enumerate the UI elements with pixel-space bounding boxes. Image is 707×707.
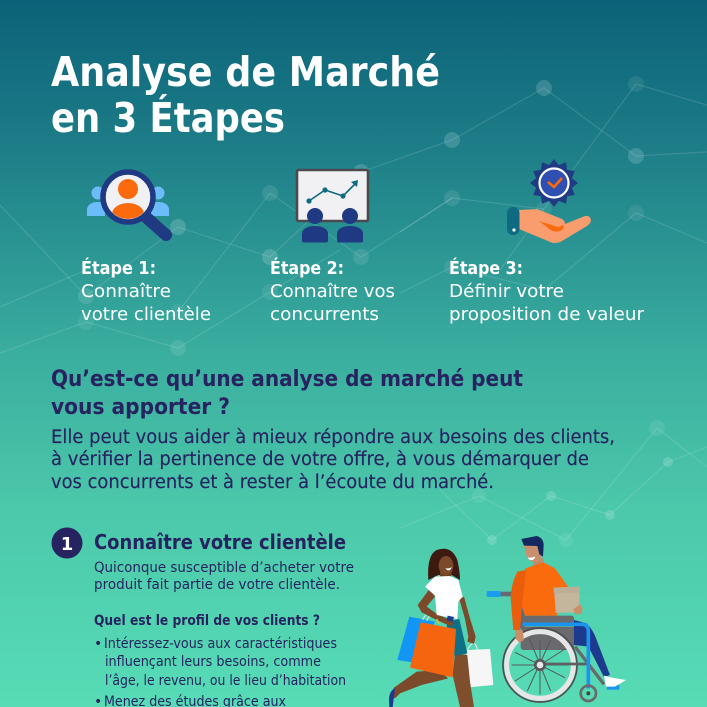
step 1 label: Étape 1: xyxy=(81,257,156,279)
bullet list: l’âge, le revenu, ou le lieu d’habitation xyxy=(105,673,346,689)
step 2 label: Étape 2: xyxy=(270,257,344,279)
subheading: Quel est le profil de vos clients ? xyxy=(94,613,320,629)
step 3 label xyxy=(449,257,645,325)
section description: Quiconque susceptible d’acheter votre xyxy=(94,560,354,576)
step 2 label: Connaître vos xyxy=(270,281,395,302)
title xyxy=(51,48,440,142)
question heading: vous apporter ? xyxy=(51,395,230,420)
step 3 label: Étape 3: xyxy=(449,257,523,279)
step 3 label: proposition de valeur xyxy=(449,304,645,325)
number badge 1 xyxy=(52,528,82,558)
icon: magnifier over customers xyxy=(87,172,169,235)
intro paragraph: Elle peut vous aider à mieux répondre aux besoins des clients, xyxy=(51,427,615,448)
title: Analyse de Marché xyxy=(51,48,440,96)
bullet list: • xyxy=(94,636,102,652)
title: en 3 Étapes xyxy=(51,94,285,142)
icon: hand with quality badge xyxy=(507,159,591,243)
illustration: woman with shopping bags xyxy=(389,549,493,707)
intro paragraph: vos concurrents et à rester à l’écoute du marché. xyxy=(51,472,494,493)
step 2 label xyxy=(270,257,395,325)
step 2 label: concurrents xyxy=(270,304,379,325)
question heading xyxy=(51,367,523,420)
illustration: man in wheelchair xyxy=(487,536,626,702)
intro paragraph xyxy=(51,427,615,493)
number badge 1: 1 xyxy=(61,534,73,555)
step 1 label: votre clientèle xyxy=(81,304,211,325)
section description xyxy=(94,560,354,593)
bullet list: Intéressez-vous aux caractéristiques xyxy=(104,636,337,652)
step 3 label: Définir votre xyxy=(449,281,564,302)
decorative network of nodes xyxy=(0,76,707,547)
bullet list xyxy=(94,636,346,707)
icon: presentation board xyxy=(297,170,368,242)
bullet list: influençant leurs besoins, comme xyxy=(105,654,321,670)
section heading: Connaître votre clientèle xyxy=(94,530,346,554)
step 1 label xyxy=(81,257,211,325)
section description: produit fait partie de votre clientèle. xyxy=(94,577,340,593)
question heading: Qu’est-ce qu’une analyse de marché peut xyxy=(51,367,523,392)
intro paragraph: à vérifier la pertinence de votre offre, à vous démarquer de xyxy=(51,449,589,470)
step 1 label: Connaître xyxy=(81,281,171,302)
